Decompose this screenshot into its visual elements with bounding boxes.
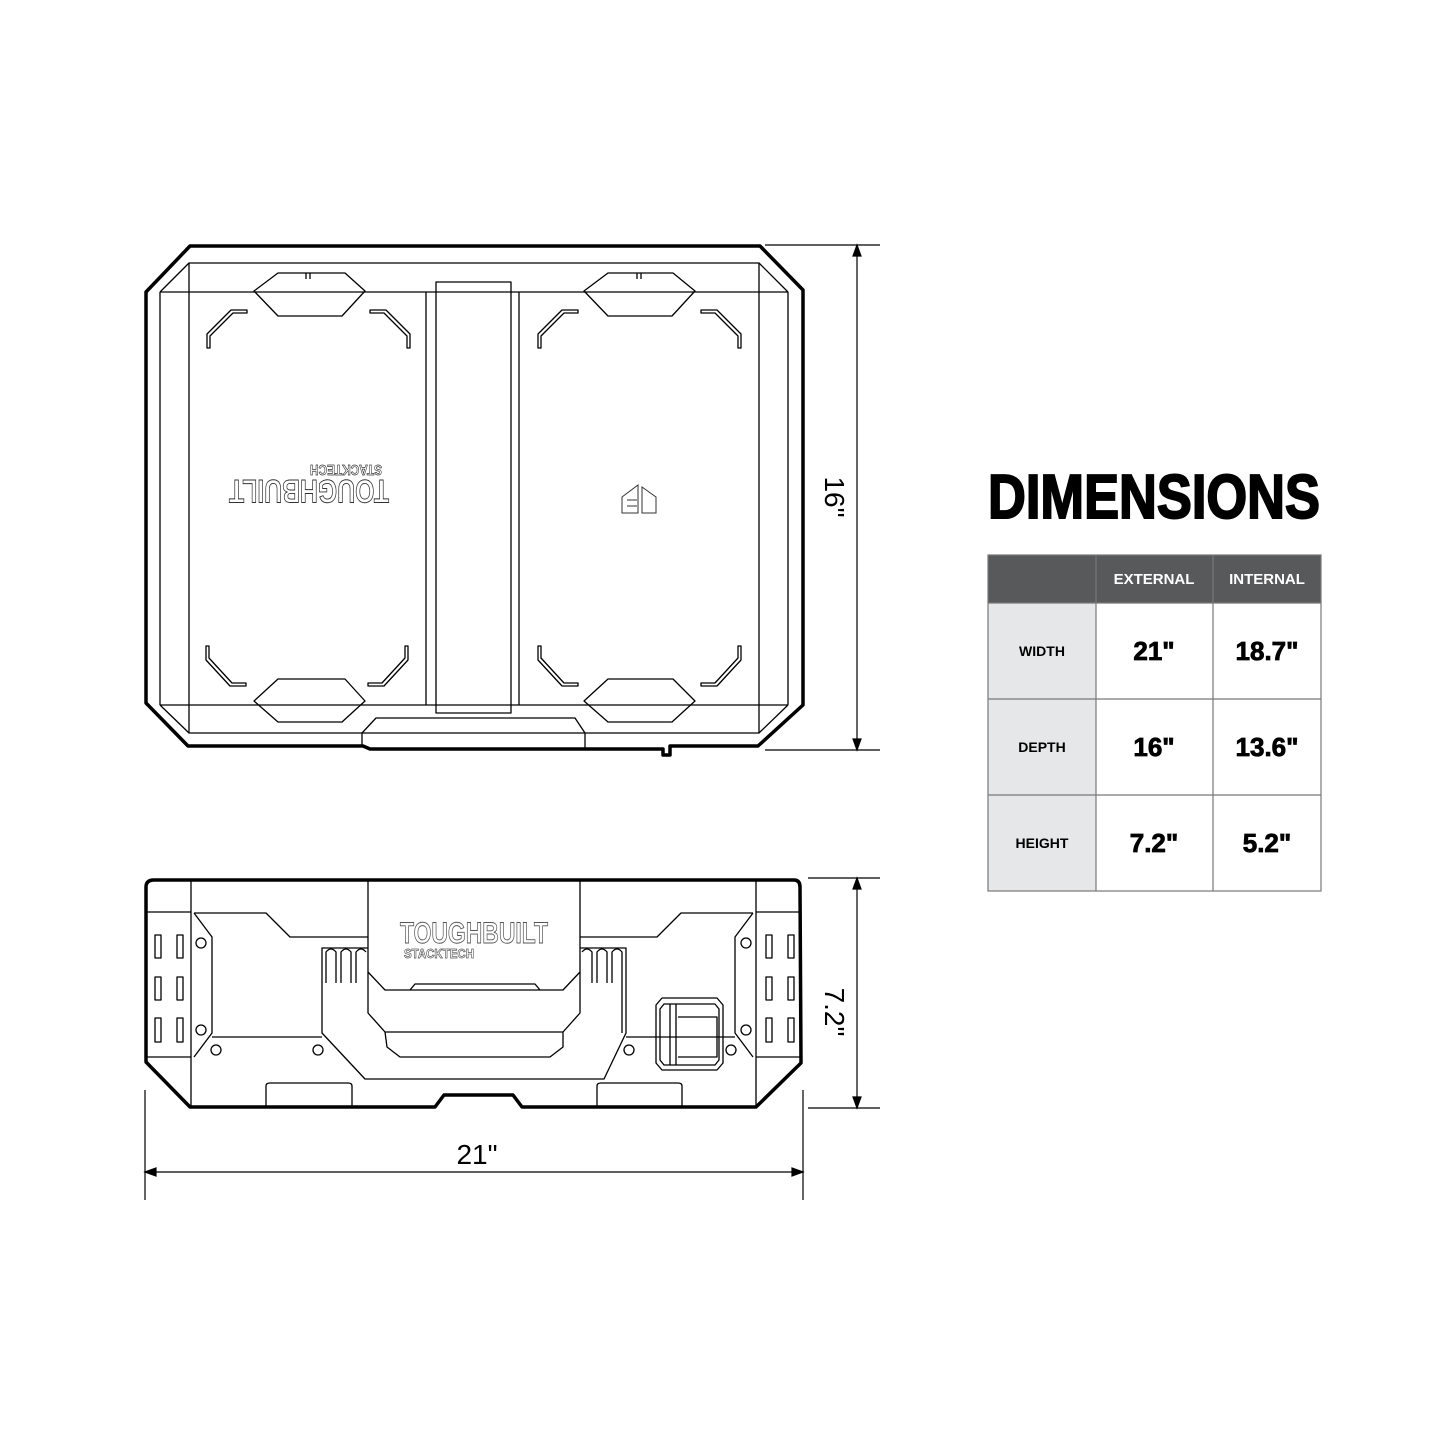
- logo: toughbuilt upside down: [229, 461, 389, 509]
- top view bottom latch: [362, 718, 585, 749]
- front view finger grips: [326, 949, 366, 983]
- table values: 21": [1133, 636, 1175, 666]
- table row labels: DEPTH: [1018, 739, 1066, 755]
- table row labels: WIDTH: [1019, 643, 1065, 659]
- top view hex pads: [254, 273, 695, 316]
- table values: 7.2": [1130, 828, 1178, 858]
- table values: 5.2": [1243, 828, 1291, 858]
- top view corner brackets: [207, 310, 247, 348]
- title: DIMENSIONS: [988, 463, 1320, 532]
- dimension 7.2: [808, 878, 880, 1108]
- table values: 16": [1133, 732, 1175, 762]
- front view feet: [266, 1083, 682, 1107]
- front view lid: [368, 880, 580, 990]
- front view latch: [656, 998, 723, 1070]
- front view side panels: [194, 913, 368, 1057]
- top view outer shell: [146, 246, 803, 755]
- front view outer shell: [146, 880, 801, 1107]
- top view handle: [426, 282, 519, 713]
- dimension 7.2: 7.2": [819, 988, 850, 1036]
- logo: toughbuilt front: [400, 917, 548, 961]
- table values: 13.6": [1236, 732, 1298, 762]
- table headers: EXTERNAL: [1114, 571, 1194, 588]
- front view drawing: [146, 880, 801, 1107]
- logo: toughbuilt upside down: TOUGHBUILT: [229, 473, 389, 509]
- dimension 16: 16": [819, 476, 850, 518]
- top view drawing: [146, 246, 803, 755]
- dimensions table: [988, 555, 1321, 891]
- dimension 21: 21": [456, 1139, 498, 1170]
- front view screws: [196, 938, 206, 948]
- table headers: INTERNAL: [1229, 571, 1305, 588]
- table headers: [1114, 571, 1305, 588]
- logo: toughbuilt front: STACKTECH: [404, 946, 474, 961]
- dimension 21: [145, 1090, 803, 1200]
- icon: CT logo: [622, 485, 656, 513]
- table values: 18.7": [1236, 636, 1298, 666]
- logo: toughbuilt front: TOUGHBUILT: [400, 917, 548, 950]
- front view handle: [322, 948, 626, 1079]
- front view vent slots: [155, 935, 183, 1042]
- table row labels: HEIGHT: [1016, 835, 1069, 851]
- table row labels: [1016, 643, 1069, 851]
- logo: toughbuilt upside down: STACKTECH: [310, 461, 382, 478]
- table values: [1130, 636, 1298, 858]
- dimension 16: [765, 245, 880, 750]
